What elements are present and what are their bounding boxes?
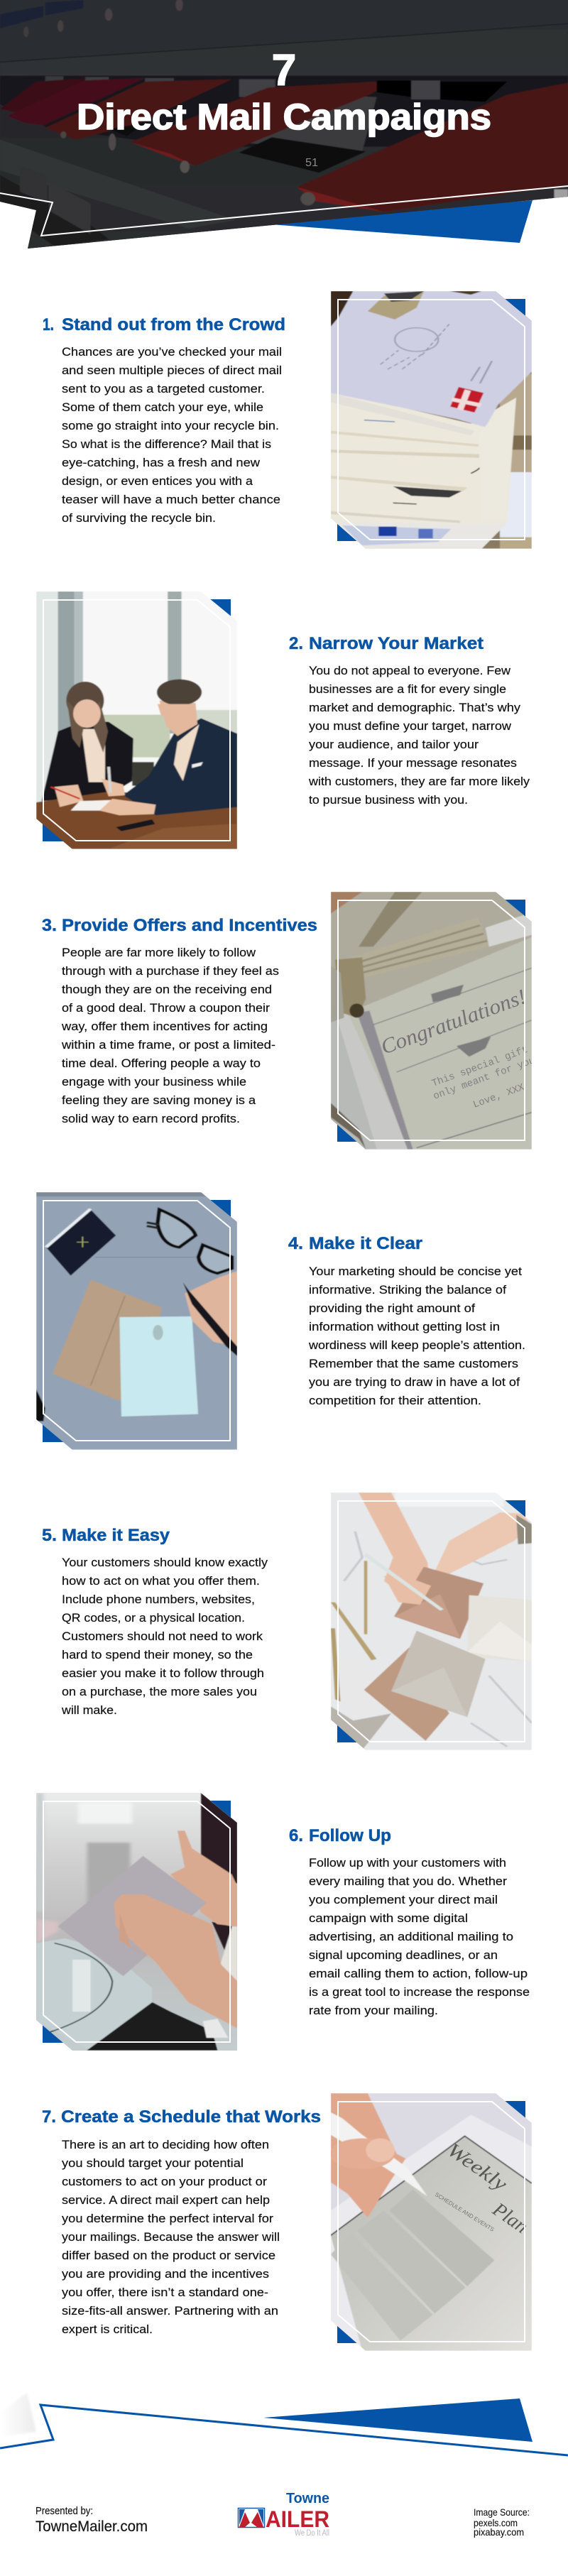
panel: section 3 xyxy=(42,892,537,1150)
body text 2: businesses are a fit for every single xyxy=(309,683,506,696)
body text 3: of a good deal. Throw a coupon their xyxy=(62,1002,271,1015)
body text 7: service. A direct mail expert can help xyxy=(62,2194,270,2207)
body text 6: is a great tool to increase the response xyxy=(309,1986,530,1999)
heading 7: 7. xyxy=(42,2107,56,2127)
hero white outline xyxy=(0,186,568,236)
body text 6: signal upcoming deadlines, or an xyxy=(309,1949,498,1962)
body text 2: your audience, and tailor your xyxy=(309,738,479,751)
image source: pexels.com xyxy=(474,2517,518,2528)
body text 4 xyxy=(308,1265,525,1407)
body text 6: email calling them to action, follow-up xyxy=(309,1968,528,1980)
body text 1: design, or even entices you with a xyxy=(62,475,253,488)
body text 1: sent to you as a targeted customer. xyxy=(62,383,265,395)
hero photo: mailboxes xyxy=(0,0,568,270)
blue accent triangle behind hero xyxy=(261,200,532,243)
body text 7: size-fits-all answer. Partnering with an xyxy=(62,2305,278,2318)
body text 6: rate from your mailing. xyxy=(309,2004,438,2017)
body text 1: Chances are you’ve checked your mail xyxy=(62,346,282,359)
body text 4: providing the right amount of xyxy=(309,1302,475,1315)
body text 6: you complement your direct mail xyxy=(309,1894,498,1906)
heading 3: 3. xyxy=(42,916,57,935)
image card 7: weekly planner on a tablet xyxy=(329,2093,532,2351)
heading 5: Make it Easy xyxy=(62,1526,170,1545)
gift tag lettering: only meant for you xyxy=(432,1055,537,1103)
body text 6 xyxy=(309,1857,530,2017)
body text 3 xyxy=(61,946,279,1125)
body text 1: and seen multiple pieces of direct mail xyxy=(62,364,282,377)
image card 2: two colleagues at a table xyxy=(36,591,237,849)
presented by xyxy=(36,2505,148,2535)
image source xyxy=(474,2506,530,2538)
body text 7: customers to act on your product or xyxy=(62,2176,268,2188)
body text 5: Your customers should know exactly xyxy=(62,1556,268,1569)
body text 4: you are trying to draw in have a lot of xyxy=(309,1376,520,1389)
body text 7: you determine the perfect interval for xyxy=(62,2212,274,2225)
body text 7: differ based on the product or service xyxy=(62,2249,275,2262)
title: Direct Mail Campaigns xyxy=(77,97,491,137)
planner lettering: SCHEDULE AND EVENTS xyxy=(434,2191,496,2233)
body text 5: hard to spend their money, so the xyxy=(62,1649,253,1661)
planner lettering xyxy=(435,2143,526,2234)
gift tag lettering: Congratulations! xyxy=(378,985,529,1059)
image source: Image Source: xyxy=(474,2506,530,2518)
body text 4: competition for their attention. xyxy=(309,1395,481,1407)
planner lettering: Weekly xyxy=(443,2139,511,2196)
body text 7: you offer, there isn’t a standard one- xyxy=(62,2286,268,2299)
body text 2 xyxy=(308,665,530,807)
panel: footer xyxy=(0,2393,568,2538)
body text 1: Some of them catch your eye, while xyxy=(62,401,263,414)
body text 1: some go straight into your recycle bin. xyxy=(62,420,279,432)
panel: section 2 xyxy=(36,591,530,849)
heading 2: Narrow Your Market xyxy=(309,634,484,653)
body text 4: informative. Striking the balance of xyxy=(309,1284,506,1297)
mailbox number: 51 xyxy=(305,157,318,169)
heading 4: Make it Clear xyxy=(309,1234,422,1253)
body text 2: you must define your target, narrow xyxy=(309,720,511,733)
panel: section 5 xyxy=(42,1492,532,1750)
body text 4: wordiness will keep people’s attention. xyxy=(308,1339,525,1352)
body text 2: market and demographic. That’s why xyxy=(309,702,521,714)
body text 1: eye-catching, has a fresh and new xyxy=(62,457,260,469)
body text 5: will make. xyxy=(61,1704,117,1717)
body text 4: information without getting lost in xyxy=(309,1321,500,1333)
image card 1: stack of envelopes xyxy=(331,291,532,549)
body text 7 xyxy=(62,2139,280,2336)
body text 3: way, offer them incentives for acting xyxy=(61,1020,268,1033)
body text 7: you should target your potential xyxy=(62,2157,244,2170)
body text 1: of surviving the recycle bin. xyxy=(62,512,216,525)
body text 5: Customers should not need to work xyxy=(62,1630,263,1643)
image card 5: hands writing on envelopes xyxy=(331,1492,532,1750)
gift tag lettering xyxy=(383,990,532,1108)
heading 2: 2. xyxy=(289,634,303,653)
body text 3: within a time frame, or post a limited- xyxy=(61,1039,275,1052)
body text 5: Include phone numbers, websites, xyxy=(62,1593,255,1606)
heading 1: 1. xyxy=(43,315,54,334)
body text 2: message. If your message resonates xyxy=(309,757,517,770)
image card 6: hands holding an envelope xyxy=(33,1791,241,2053)
body text 6: Follow up with your customers with xyxy=(309,1857,506,1870)
footer shadow xyxy=(0,2393,36,2436)
body text 1: teaser will have a much better chance xyxy=(62,493,280,506)
body text 6: campaign with some digital xyxy=(309,1912,468,1925)
heading 5: 5. xyxy=(42,1526,57,1545)
logo: Towne Mailer xyxy=(239,2491,329,2538)
logo: Towne Mailer: AILER xyxy=(266,2506,329,2532)
heading 1: Stand out from the Crowd xyxy=(62,315,285,334)
footer blue triangle xyxy=(263,2398,532,2442)
presented by: TowneMailer.com xyxy=(36,2518,148,2535)
body text 5: on a purchase, the more sales you xyxy=(62,1686,257,1698)
body text 3: solid way to earn record profits. xyxy=(62,1113,240,1125)
panel: section 4 xyxy=(36,1192,525,1450)
image source: pixabay.com xyxy=(474,2526,524,2538)
heading 6: 6. xyxy=(289,1826,303,1845)
body text 1: So what is the difference? Mail that is xyxy=(62,438,271,451)
body text 5 xyxy=(61,1556,268,1717)
body text 4: Remember that the same customers xyxy=(309,1358,518,1370)
body text 5: easier you make it to follow through xyxy=(62,1667,264,1680)
body text 7: you are providing and the incentives xyxy=(62,2268,269,2281)
body text 7: expert is critical. xyxy=(62,2323,153,2336)
body text 7: your mailings. Because the answer will xyxy=(62,2231,280,2244)
body text 3: though they are on the receiving end xyxy=(62,983,272,996)
body text 3: People are far more likely to follow xyxy=(62,946,256,959)
gift tag lettering: This special gift xyxy=(430,1044,530,1090)
planner lettering: Plan xyxy=(488,2198,532,2238)
logo: Towne Mailer: Towne xyxy=(286,2491,329,2506)
body text 2: with customers, they are far more likely xyxy=(308,775,530,788)
heading 6: Follow Up xyxy=(309,1826,391,1845)
gift tag lettering: Love, XXX xyxy=(471,1082,526,1111)
body text 3: time deal. Offering people a way to xyxy=(62,1057,261,1070)
body text 5: QR codes, or a physical location. xyxy=(62,1612,245,1625)
body text 1 xyxy=(62,346,282,525)
body text 4: Your marketing should be concise yet xyxy=(309,1265,522,1278)
panel: hero header xyxy=(0,0,568,270)
body text 5: how to act on what you offer them. xyxy=(62,1575,260,1588)
title: 7 xyxy=(272,46,296,95)
body text 3: engage with your business while xyxy=(62,1076,246,1088)
presented by: Presented by: xyxy=(36,2505,93,2517)
image card 4: desk with envelope and glasses xyxy=(36,1192,237,1450)
body text 6: advertising, an additional mailing to xyxy=(309,1931,513,1943)
panel: section 7 xyxy=(42,2093,532,2351)
heading 7: Create a Schedule that Works xyxy=(61,2107,321,2127)
logo: Towne Mailer: We Do It All xyxy=(295,2529,329,2538)
title xyxy=(77,46,491,137)
panel: section 1 xyxy=(43,291,532,549)
image card 3: congratulations gift tag xyxy=(331,892,537,1150)
panel: section 6 xyxy=(33,1791,530,2053)
heading 3: Provide Offers and Incentives xyxy=(62,916,317,935)
body text 7: There is an art to deciding how often xyxy=(62,2139,269,2151)
body text 2: You do not appeal to everyone. Few xyxy=(309,665,510,677)
footer blue outline xyxy=(0,2405,568,2455)
heading 4: 4. xyxy=(288,1234,303,1253)
body text 3: feeling they are saving money is a xyxy=(62,1094,256,1107)
body text 2: to pursue business with you. xyxy=(309,794,468,807)
body text 3: through with a purchase if they feel as xyxy=(62,965,279,978)
body text 6: every mailing that you do. Whether xyxy=(309,1875,508,1888)
